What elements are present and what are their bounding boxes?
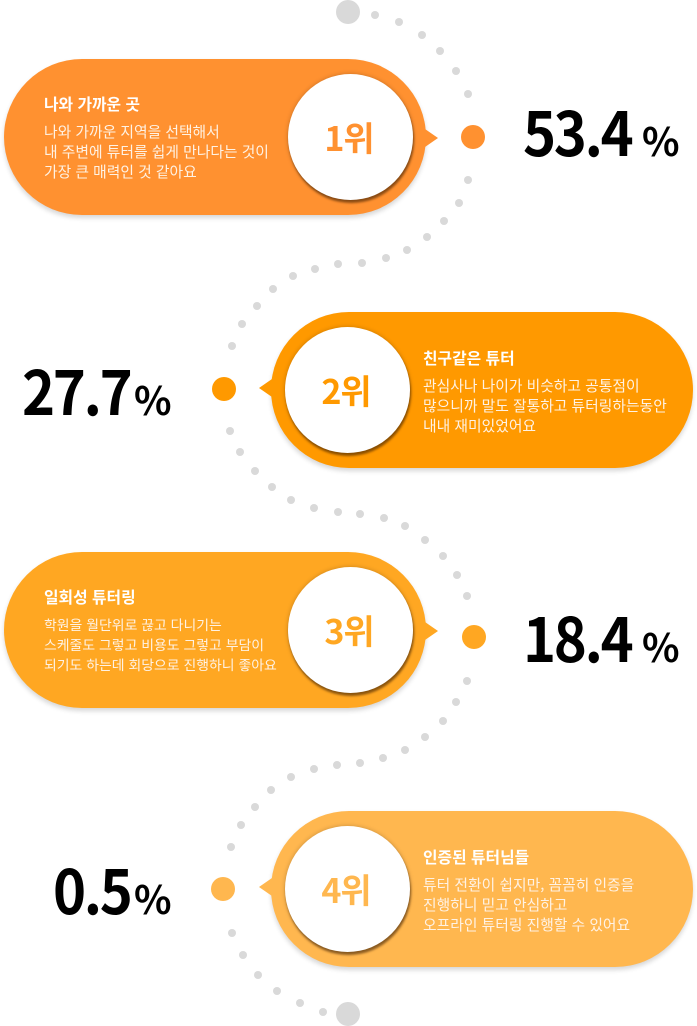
percentage: 53.4 xyxy=(523,85,631,174)
heading and description: 진행하니 믿고 안심하고 xyxy=(423,894,567,915)
percentage xyxy=(523,591,680,680)
pill background xyxy=(271,811,693,967)
heading and description: 내 주변에 튜터를 쉽게 만나다는 것이 xyxy=(44,141,269,162)
pointer xyxy=(259,379,272,397)
heading and description: 많으니까 말도 잘통하고 튜터링하는동안 xyxy=(423,395,667,416)
heading and description: 관심사나 나이가 비슷하고 공통점이 xyxy=(423,375,640,396)
percentage: % xyxy=(642,112,680,168)
heading and description xyxy=(423,845,634,935)
percentage: % xyxy=(134,870,172,926)
marker dot xyxy=(462,625,486,649)
rank badge: 4위 xyxy=(321,864,371,913)
panel: rank 2 xyxy=(22,312,694,473)
percentage: 18.4 xyxy=(523,591,631,680)
marker dot xyxy=(211,877,235,901)
marker dot xyxy=(212,377,236,401)
heading and description: 인증된 튜터님들 xyxy=(423,845,529,868)
pill background xyxy=(4,59,426,215)
heading and description: 나와 가까운 지역을 선택해서 xyxy=(44,121,220,142)
percentage: % xyxy=(642,618,680,674)
percentage: % xyxy=(134,371,172,427)
pointer xyxy=(425,129,438,147)
pointer xyxy=(259,878,272,896)
heading and description: 내내 재미있었어요 xyxy=(423,415,536,436)
heading and description: 스케줄도 그렇고 비용도 그렇고 부담이 xyxy=(44,635,264,655)
heading and description xyxy=(423,346,667,436)
heading and description: 되기도 하는데 회당으로 진행하니 좋아요 xyxy=(44,655,277,675)
pill background xyxy=(271,312,693,468)
heading and description: 튜터 전환이 쉽지만, 꼼꼼히 인증을 xyxy=(423,874,634,895)
rank badge xyxy=(285,826,410,952)
percentage xyxy=(523,85,680,174)
panel: rank 1 xyxy=(2,59,680,220)
heading and description xyxy=(44,92,269,182)
rank badge: 3위 xyxy=(324,605,374,654)
percentage: 27.7 xyxy=(22,344,130,433)
heading and description xyxy=(44,585,277,675)
heading and description: 일회성 튜터링 xyxy=(44,585,136,608)
marker dot xyxy=(461,125,485,149)
pointer xyxy=(425,622,438,640)
heading and description: 친구같은 튜터 xyxy=(423,346,515,369)
heading and description: 오프라인 튜터링 진행할 수 있어요 xyxy=(423,914,630,935)
heading and description: 가장 큰 매력인 것 같아요 xyxy=(44,161,197,182)
heading and description: 나와 가까운 곳 xyxy=(44,92,140,115)
percentage xyxy=(53,843,172,932)
rank badge: 2위 xyxy=(321,365,371,414)
pill background xyxy=(4,552,426,708)
heading and description: 학원을 월단위로 끊고 다니기는 xyxy=(44,615,222,635)
panel: rank 3 xyxy=(2,552,680,713)
rank badge xyxy=(288,74,413,200)
rank badge: 1위 xyxy=(324,112,374,161)
percentage: 0.5 xyxy=(53,843,131,932)
rank badge xyxy=(285,327,410,453)
rank badge xyxy=(288,567,413,693)
panel: rank 4 xyxy=(53,811,694,972)
